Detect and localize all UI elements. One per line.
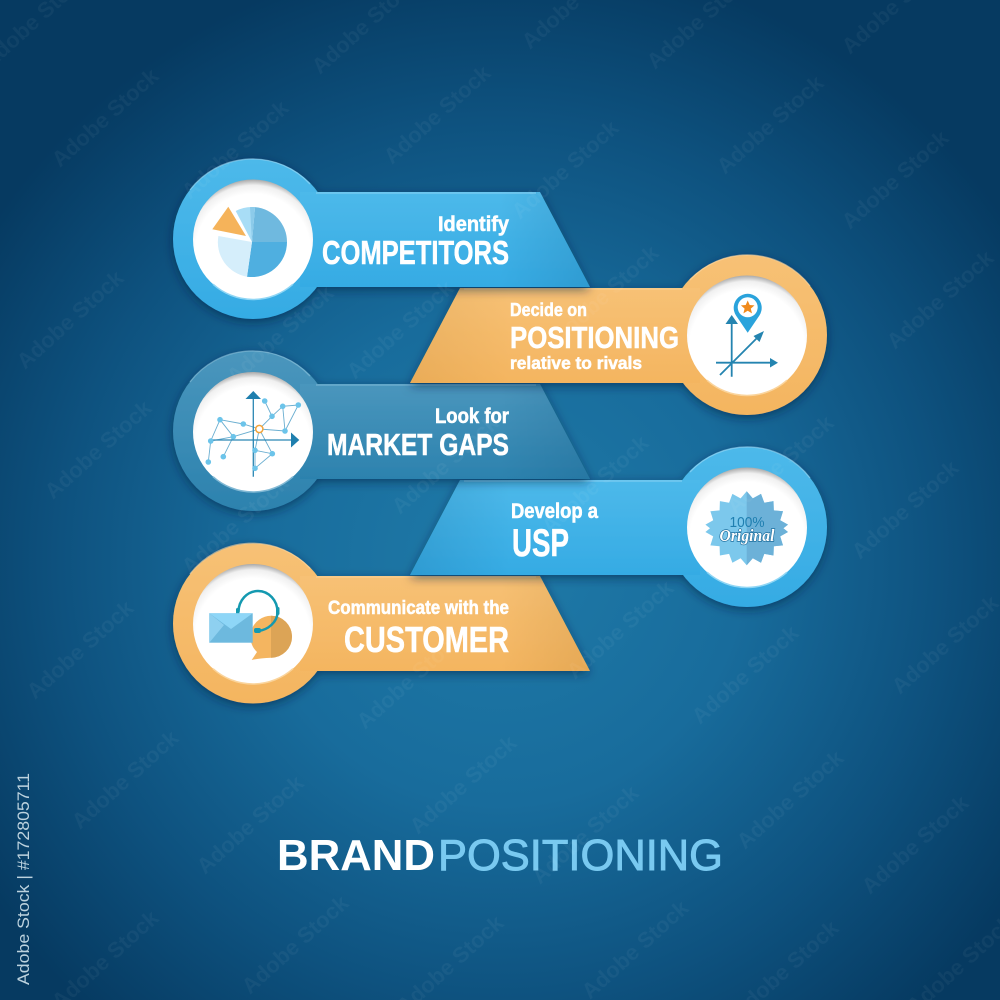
watermarks: Adobe Stock xyxy=(237,890,354,999)
watermarks: Adobe Stock xyxy=(562,575,679,684)
text: identify: Identify xyxy=(438,213,509,236)
icon: location pin xyxy=(734,294,762,333)
title xyxy=(277,831,723,880)
icon: envelope xyxy=(209,613,253,643)
watermarks: Adobe Stock xyxy=(722,410,839,519)
text: original: Original xyxy=(720,526,775,545)
text: positioning: POSITIONING xyxy=(510,320,679,355)
watermarks: Adobe Stock xyxy=(507,115,624,224)
text: competitors: COMPETITORS xyxy=(322,234,509,271)
watermarks: Adobe Stock xyxy=(192,770,309,879)
text: customer: CUSTOMER xyxy=(344,619,509,660)
watermarks: Adobe Stock xyxy=(547,240,664,349)
chart: scatter network xyxy=(206,391,301,477)
text: market gaps: MARKET GAPS xyxy=(327,427,509,462)
panel: positioning xyxy=(410,255,827,415)
watermarks: Adobe Stock xyxy=(67,725,184,834)
watermarks: Adobe Stock xyxy=(40,395,157,504)
band: positioning xyxy=(410,255,827,415)
watermarks: Adobe Stock xyxy=(47,63,164,172)
band: usp xyxy=(410,447,827,607)
watermarks: Adobe Stock xyxy=(882,245,999,354)
text: develop a: Develop a xyxy=(511,500,598,523)
watermarks: Adobe Stock xyxy=(352,625,469,734)
watermarks: Adobe Stock xyxy=(342,275,459,384)
watermarks: Adobe Stock xyxy=(857,790,974,899)
icon: original badge xyxy=(705,491,788,565)
well: positioning xyxy=(687,276,807,396)
watermarks: Adobe Stock xyxy=(887,590,1000,699)
panel: usp xyxy=(410,447,827,607)
well: competitors xyxy=(193,180,313,300)
text: decide on: Decide on xyxy=(510,299,587,320)
watermarks: Adobe Stock xyxy=(527,780,644,889)
text: usp: USP xyxy=(512,522,569,565)
watermarks: Adobe Stock xyxy=(837,125,954,234)
watermarks: Adobe Stock xyxy=(732,745,849,854)
watermarks: Adobe Stock xyxy=(177,95,294,204)
watermarks: Adobe Stock xyxy=(405,730,522,839)
watermarks: Adobe Stock xyxy=(847,455,964,564)
stock credit: Adobe Stock | #172805711 xyxy=(14,773,33,985)
panel: competitors xyxy=(173,159,590,319)
watermarks: Adobe Stock xyxy=(387,410,504,519)
icon: speech bubble xyxy=(250,616,292,660)
panel: customer xyxy=(173,543,590,704)
watermarks: Adobe Stock xyxy=(687,620,804,729)
title: brand: BRAND xyxy=(277,831,435,880)
watermarks: Adobe Stock xyxy=(177,470,294,579)
watermarks: Adobe Stock xyxy=(222,280,339,389)
watermarks: Adobe Stock xyxy=(22,595,139,704)
watermarks: Adobe Stock xyxy=(712,70,829,179)
panel: market gaps xyxy=(173,351,590,511)
text: look for: Look for xyxy=(435,405,509,428)
icon: headset xyxy=(236,591,280,633)
text: relative to rivals: relative to rivals xyxy=(510,353,642,373)
well: customer xyxy=(193,564,313,684)
title: positioning: POSITIONING xyxy=(438,831,723,880)
watermarks: Adobe Stock xyxy=(12,265,129,374)
band: competitors xyxy=(173,159,590,319)
well: usp xyxy=(687,468,807,588)
text: 100%: 100% xyxy=(730,514,764,531)
band: customer xyxy=(173,544,590,704)
watermarks: Adobe Stock xyxy=(379,60,496,169)
chart: pie xyxy=(212,207,287,277)
band: market gaps xyxy=(173,351,590,511)
chart: positioning axes xyxy=(716,315,778,377)
text: communicate with the: Communicate with the xyxy=(328,598,509,619)
well: market gaps xyxy=(193,372,313,492)
watermarks: Adobe Stock xyxy=(537,430,654,539)
